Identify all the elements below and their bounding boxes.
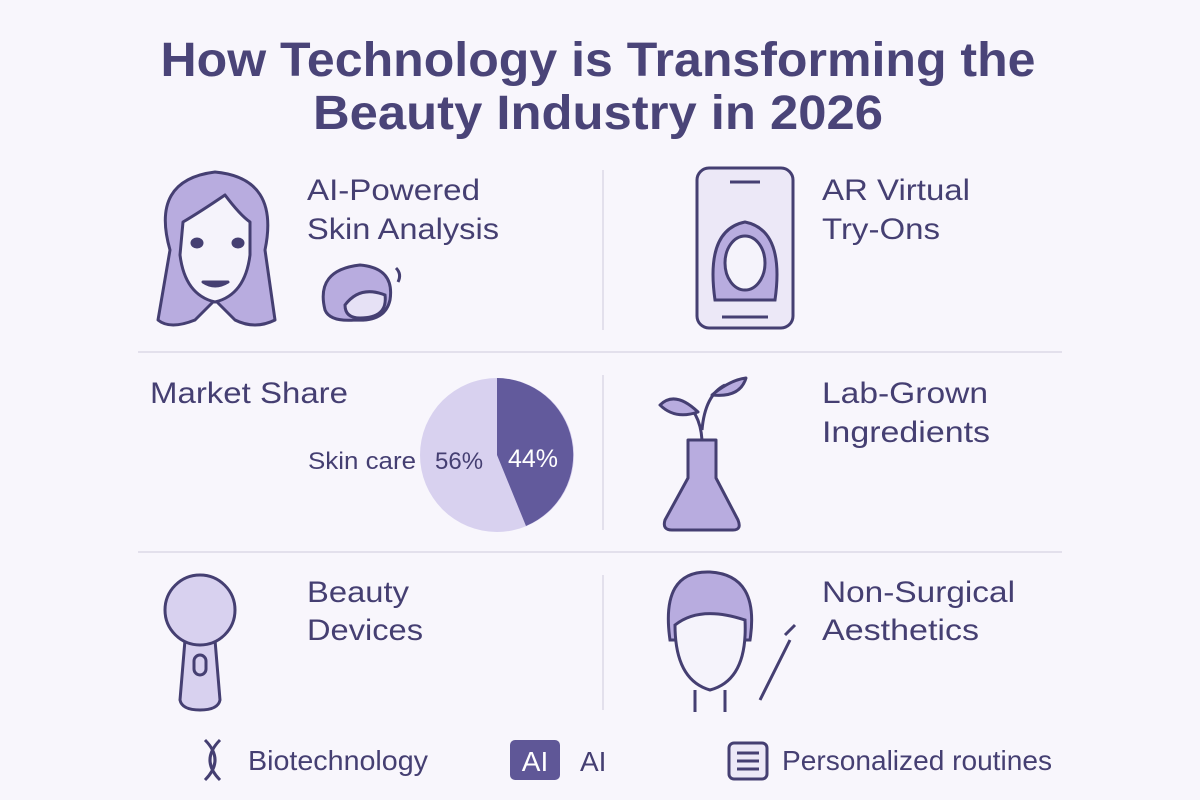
heading: Ingredients [822, 416, 990, 449]
heading: Lab-Grown [822, 377, 988, 410]
heading [822, 576, 1015, 647]
legend: AI [580, 746, 606, 777]
heading: AR Virtual [822, 174, 970, 207]
icon: AI badge: AI [522, 746, 548, 777]
icon: woman face [158, 172, 275, 325]
title: Beauty Industry in 2026 [313, 87, 883, 140]
heading [307, 576, 423, 647]
panel: non-surgical [668, 572, 1015, 712]
title [160, 34, 1036, 140]
pie chart: 44% [508, 445, 558, 473]
panel: AI skin analysis [158, 172, 499, 325]
pie chart [308, 378, 574, 532]
panel: lab-grown [660, 377, 990, 530]
legend: Biotechnology [248, 745, 428, 776]
pie chart: 56% [435, 448, 483, 475]
heading: Aesthetics [822, 614, 979, 647]
heading [307, 174, 499, 246]
icon: cleansing brush [165, 575, 235, 710]
heading: Skin Analysis [307, 213, 499, 246]
heading: Non-Surgical [822, 576, 1015, 609]
title: How Technology is Transforming the [160, 34, 1036, 87]
pie chart: Skin care [308, 448, 416, 475]
panel: beauty devices [165, 575, 423, 710]
heading: AI-Powered [307, 174, 480, 207]
icon: list [729, 743, 767, 779]
icon: face with syringe [668, 572, 795, 712]
heading: Market Share [150, 377, 348, 410]
icon: AI badge [510, 740, 560, 780]
legend [205, 740, 1052, 780]
icon: flask with leaves [660, 378, 746, 530]
panel: AR try-ons [697, 168, 970, 328]
legend: Personalized routines [782, 745, 1052, 776]
heading: Try-Ons [822, 213, 940, 246]
icon: brain blob [323, 265, 400, 320]
heading [822, 377, 990, 449]
icon: phone [697, 168, 793, 328]
panel: market share [150, 377, 574, 532]
heading [822, 174, 970, 246]
heading: Devices [307, 614, 423, 647]
icon: dna [205, 740, 220, 780]
heading: Beauty [307, 576, 409, 609]
